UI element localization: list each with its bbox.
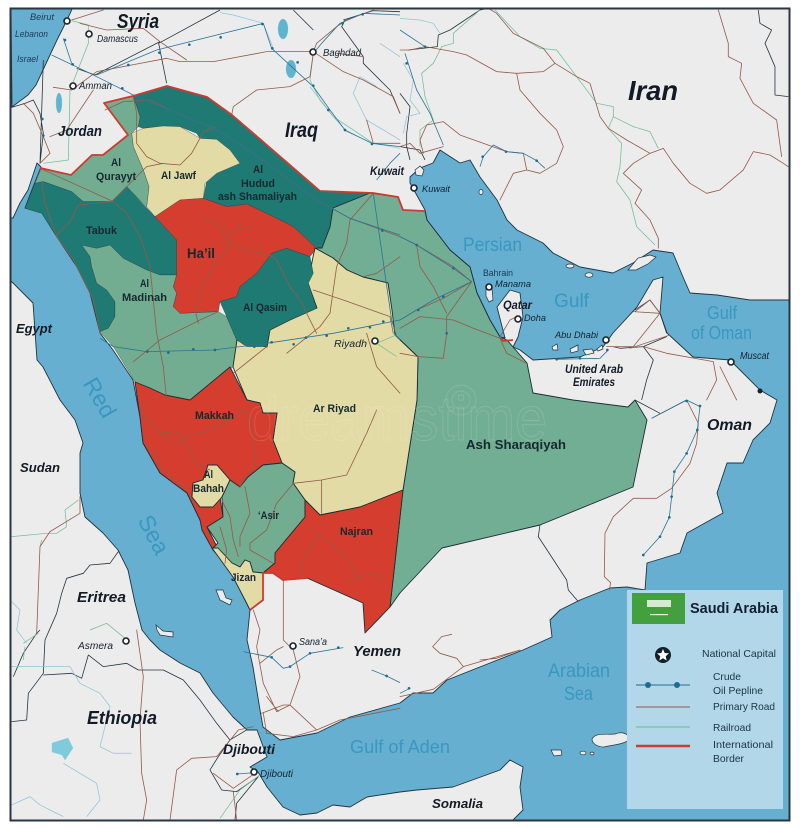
region labels: Jizan [231,572,256,584]
region: Al Hudud ash Shamaliyah [133,86,370,248]
sea labels: Arabian [548,661,610,682]
legend: crude oil pipeline [636,671,763,697]
country labels: Qatar [503,298,533,312]
region labels [86,157,566,584]
city labels: Damascus [97,34,138,45]
international border in red [40,86,513,610]
legend: international border: Border [713,753,744,765]
country labels: Yemen [353,643,401,660]
sea labels: Persian [463,235,522,256]
region labels: Ha’il [187,245,215,261]
national capital markers [64,18,762,775]
city labels: Lebanon [15,29,48,39]
region: Al Madinah [82,245,237,400]
region labels: Makkah [195,410,234,422]
region labels: Najran [340,526,373,538]
legend: railroad: Railroad [713,722,751,734]
region labels: Al Qasim [243,302,287,314]
legend: international border: International [713,739,773,751]
region: Ha'il [155,198,317,313]
region labels: ‘Asir [258,510,280,522]
legend: primary road [636,701,775,713]
city labels: Sana’a [299,637,327,648]
country labels: Ethiopia [87,708,157,728]
city labels: Muscat [740,351,770,362]
region labels: Al [140,278,149,290]
lakes [52,19,296,760]
region labels: Al Jawf [161,170,196,182]
city labels: Manama [495,279,531,289]
watermark: dreamstime [247,385,547,454]
roads and railroads, quadrant 2 [400,8,788,400]
region: Makkah [135,367,282,550]
legend: crude oil pipeline: Oil Pepline [713,685,763,697]
legend: national capital [655,647,776,663]
icon: Saudi flag [632,593,685,624]
sea labels: Gulf [707,303,738,323]
region labels: Ar Riyad [313,403,356,415]
city labels: Kuwait [422,184,451,194]
legend: railroad [636,722,751,734]
region labels: Qurayyt [96,171,136,183]
label: Bahrain: Bahrain [483,268,513,278]
country labels: Eritrea [77,589,126,606]
city labels: Amman [78,81,112,92]
country labels: Djibouti [223,741,276,757]
city labels: Baghdad [323,48,361,59]
legend title: Saudi Arabia [690,600,779,617]
region labels: Ash Sharaqiyah [466,437,566,452]
region labels: Al [204,469,213,481]
sea labels: Red [78,373,122,422]
region: Ash Sharaqiyah [315,193,647,607]
city labels: Beirut [30,12,55,22]
roads, quadrant 1 [23,10,400,400]
region labels: ash Shamaliyah [218,191,297,203]
oil pipelines, quadrant 1 [41,13,400,354]
country labels: Iraq [285,119,318,142]
country labels: Syria [117,11,159,33]
sea labels: Gulf [554,291,590,312]
city labels: Israel [17,54,39,64]
country labels: Jordan [58,123,102,140]
rivers and railroads, quadrant 1 [43,13,400,357]
sea labels: Gulf of Aden [350,737,450,757]
region labels: Tabuk [86,225,118,237]
country labels: Iran [628,75,678,106]
water: seas and gulfs [11,150,789,820]
country labels: Egypt [16,321,53,336]
country labels: United Arab [565,362,623,376]
region: Najran [263,490,403,633]
oil pipelines, quadrant 4 [400,400,701,693]
region: Tabuk [25,182,177,332]
country labels: Kuwait [370,164,405,178]
region labels: Al [111,157,121,169]
city labels: Abu Dhabi [554,330,599,340]
oil pipelines, quadrant 2 [400,30,609,361]
city labels: Djibouti [260,769,294,780]
sea labels: Sea [564,684,593,705]
legend: crude oil pipeline: Crude [713,671,741,683]
legend: national capital: National Capital [702,648,776,660]
legend: primary road: Primary Road [713,701,775,713]
region: Jizan [212,548,263,610]
region labels: Madinah [122,292,167,304]
sea labels: Sea [133,510,175,559]
roads and railroads, quadrant 3 [12,400,400,820]
region: Ar Riyad [233,248,418,515]
country borders [12,10,400,163]
country labels: Somalia [432,797,483,811]
sea labels: of Oman [691,323,752,343]
region: 'Asir [207,463,305,573]
water: Mediterranean Sea [11,9,72,107]
country labels: Sudan [20,460,60,475]
country labels: Oman [707,417,752,434]
legend panel [627,590,783,809]
region: Al Qasim [220,248,317,347]
city labels: Asmera [77,641,113,652]
region labels: Al [253,164,263,176]
legend: international border [636,739,773,765]
city labels: Riyadh [334,339,367,350]
region labels: Hudud [241,178,275,190]
region: Al Jawf [132,126,240,217]
region labels: Bahah [193,483,224,495]
sea labels [78,235,752,757]
region: Al Bahah [192,465,230,507]
islands [156,166,656,756]
roads, quadrant 4 [400,400,698,697]
country labels: Emirates [573,375,615,389]
region: Al Qurayyat [35,97,149,207]
oil pipelines, quadrant 3 [236,646,400,775]
city labels: Doha [524,313,546,323]
